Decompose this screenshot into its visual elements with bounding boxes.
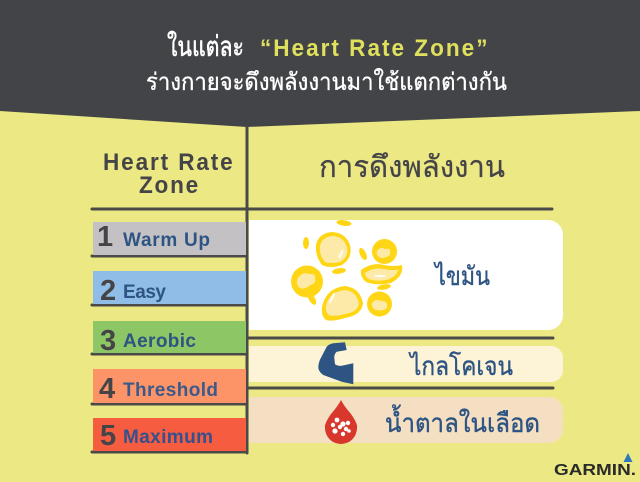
header banner bbox=[0, 0, 640, 127]
zone 4 row: Threshold bbox=[123, 380, 218, 401]
zone 4 row bbox=[93, 369, 246, 405]
column heading: energy source: การดึงพลังงาน bbox=[319, 151, 505, 184]
zone 2 row bbox=[93, 271, 246, 307]
zone 1 row bbox=[93, 221, 246, 255]
zone 5 row: 5 bbox=[100, 420, 116, 452]
zone 3 row bbox=[93, 321, 246, 357]
column heading: Heart Rate Zone: Heart Rate bbox=[103, 148, 233, 175]
zone 2 row: Easy bbox=[123, 282, 166, 303]
zone 3 row: Aerobic bbox=[123, 331, 196, 352]
panel: blood sugar bbox=[249, 397, 563, 444]
zone 1 row: Warm Up bbox=[123, 230, 210, 251]
icon: fat globules bbox=[291, 219, 402, 321]
title highlight: “Heart Rate Zone” bbox=[260, 34, 487, 61]
label: glycogen: ไกลโคเจน bbox=[408, 351, 513, 381]
panel: glycogen bbox=[249, 342, 563, 384]
zone 5 row: Maximum bbox=[123, 427, 213, 448]
logo: Garmin bbox=[554, 453, 636, 479]
zone 5 row bbox=[93, 418, 246, 452]
label: fat: ไขมัน bbox=[433, 261, 490, 291]
zone 1 row: 1 bbox=[97, 221, 113, 253]
label: blood sugar: น้ำตาลในเลือด bbox=[385, 404, 540, 438]
column heading: Heart Rate Zone: Zone bbox=[139, 171, 198, 198]
logo: Garmin: GARMIN. bbox=[554, 462, 636, 479]
panel: fat bbox=[249, 219, 563, 330]
zone 3 row: 3 bbox=[100, 325, 116, 357]
zone 2 row: 2 bbox=[100, 275, 116, 307]
icon: blood drop bbox=[325, 400, 357, 444]
zone 4 row: 4 bbox=[99, 373, 115, 405]
title line 2: ร่างกายจะดึงพลังงานมาใช้แตกต่างกัน bbox=[146, 68, 507, 96]
title line 1: ในแต่ละ bbox=[167, 30, 244, 62]
table grid lines bbox=[92, 127, 553, 453]
column heading: Heart Rate Zone bbox=[103, 148, 233, 198]
icon: flexed arm bbox=[318, 342, 353, 384]
